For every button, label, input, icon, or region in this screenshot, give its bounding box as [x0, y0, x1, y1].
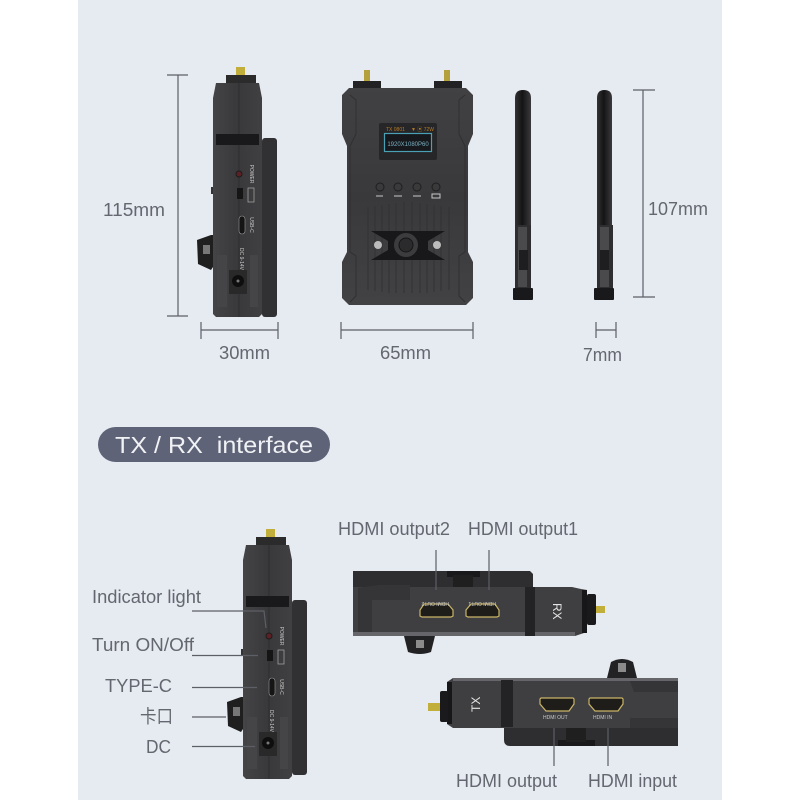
- device front view: [342, 70, 473, 305]
- callout: clip mount: 卡口: [140, 706, 173, 727]
- HDMI ports: [540, 698, 623, 721]
- callout: DC: [146, 736, 255, 757]
- HDMI output ports: [420, 600, 499, 617]
- callout: HDMI output1: HDMI output1: [468, 518, 578, 539]
- device side view (top): USB-C: [248, 217, 254, 233]
- callout: HDMI output2: [338, 518, 450, 590]
- device side view (interface): USB-C: [278, 679, 284, 695]
- antennas: [513, 90, 614, 300]
- HDMI output ports: HDMI OUT2: [421, 600, 449, 606]
- screen: TX 0801: [386, 127, 405, 133]
- callout: clip mount: [140, 706, 226, 727]
- heading pill: TX / RX interface: [115, 432, 313, 458]
- TX device: [428, 659, 678, 746]
- callout: HDMI output: [456, 728, 557, 791]
- heading pill: [98, 427, 330, 462]
- RX device: [353, 571, 605, 654]
- screen: 1920X1080P60: [387, 142, 429, 148]
- vents: [368, 202, 449, 293]
- dimension: 115mm: [103, 75, 188, 316]
- dimension: 65mm: 65mm: [380, 342, 431, 363]
- HDMI output ports: HDMI OUT1: [468, 600, 496, 606]
- dimension: 107mm: [633, 90, 708, 297]
- callout: Turn ON/Off: Turn ON/Off: [92, 634, 195, 655]
- HDMI ports: HDMI OUT: [543, 715, 568, 721]
- mount clamp: [371, 231, 445, 260]
- dimension: 107mm: 107mm: [648, 198, 708, 219]
- screen: [379, 123, 437, 160]
- RX device: RX: [550, 603, 564, 620]
- callout: TYPE-C: TYPE-C: [105, 675, 172, 696]
- callout: HDMI output1: [468, 518, 578, 590]
- callout: HDMI input: HDMI input: [588, 770, 677, 791]
- device side view (top): DC 9-14V: [238, 248, 244, 271]
- device side view (interface): [227, 529, 307, 779]
- device side view (top): POWER: [248, 165, 254, 184]
- callout: DC: DC: [146, 736, 171, 757]
- device side view (interface): POWER: [278, 627, 284, 646]
- dimension: 30mm: [201, 322, 278, 363]
- buttons: [376, 183, 440, 198]
- device side view (top): [197, 67, 277, 317]
- HDMI ports: HDMI IN: [593, 715, 613, 721]
- callout: HDMI input: [588, 728, 677, 791]
- dimension: 7mm: 7mm: [583, 344, 622, 365]
- callout: HDMI output2: HDMI output2: [338, 518, 450, 539]
- dimension: 7mm: [583, 322, 622, 365]
- dimension: 65mm: [341, 322, 473, 363]
- TX device: TX: [469, 697, 483, 712]
- callout: HDMI output: HDMI output: [456, 770, 557, 791]
- device side view (interface): DC 9-14V: [268, 710, 274, 733]
- callout: Indicator light: Indicator light: [92, 586, 201, 607]
- dimension: 115mm: 115mm: [103, 199, 165, 220]
- screen: ▼ ▣ 72W: [411, 127, 434, 133]
- dimension: 30mm: 30mm: [219, 342, 270, 363]
- callout: Indicator light: [92, 586, 266, 628]
